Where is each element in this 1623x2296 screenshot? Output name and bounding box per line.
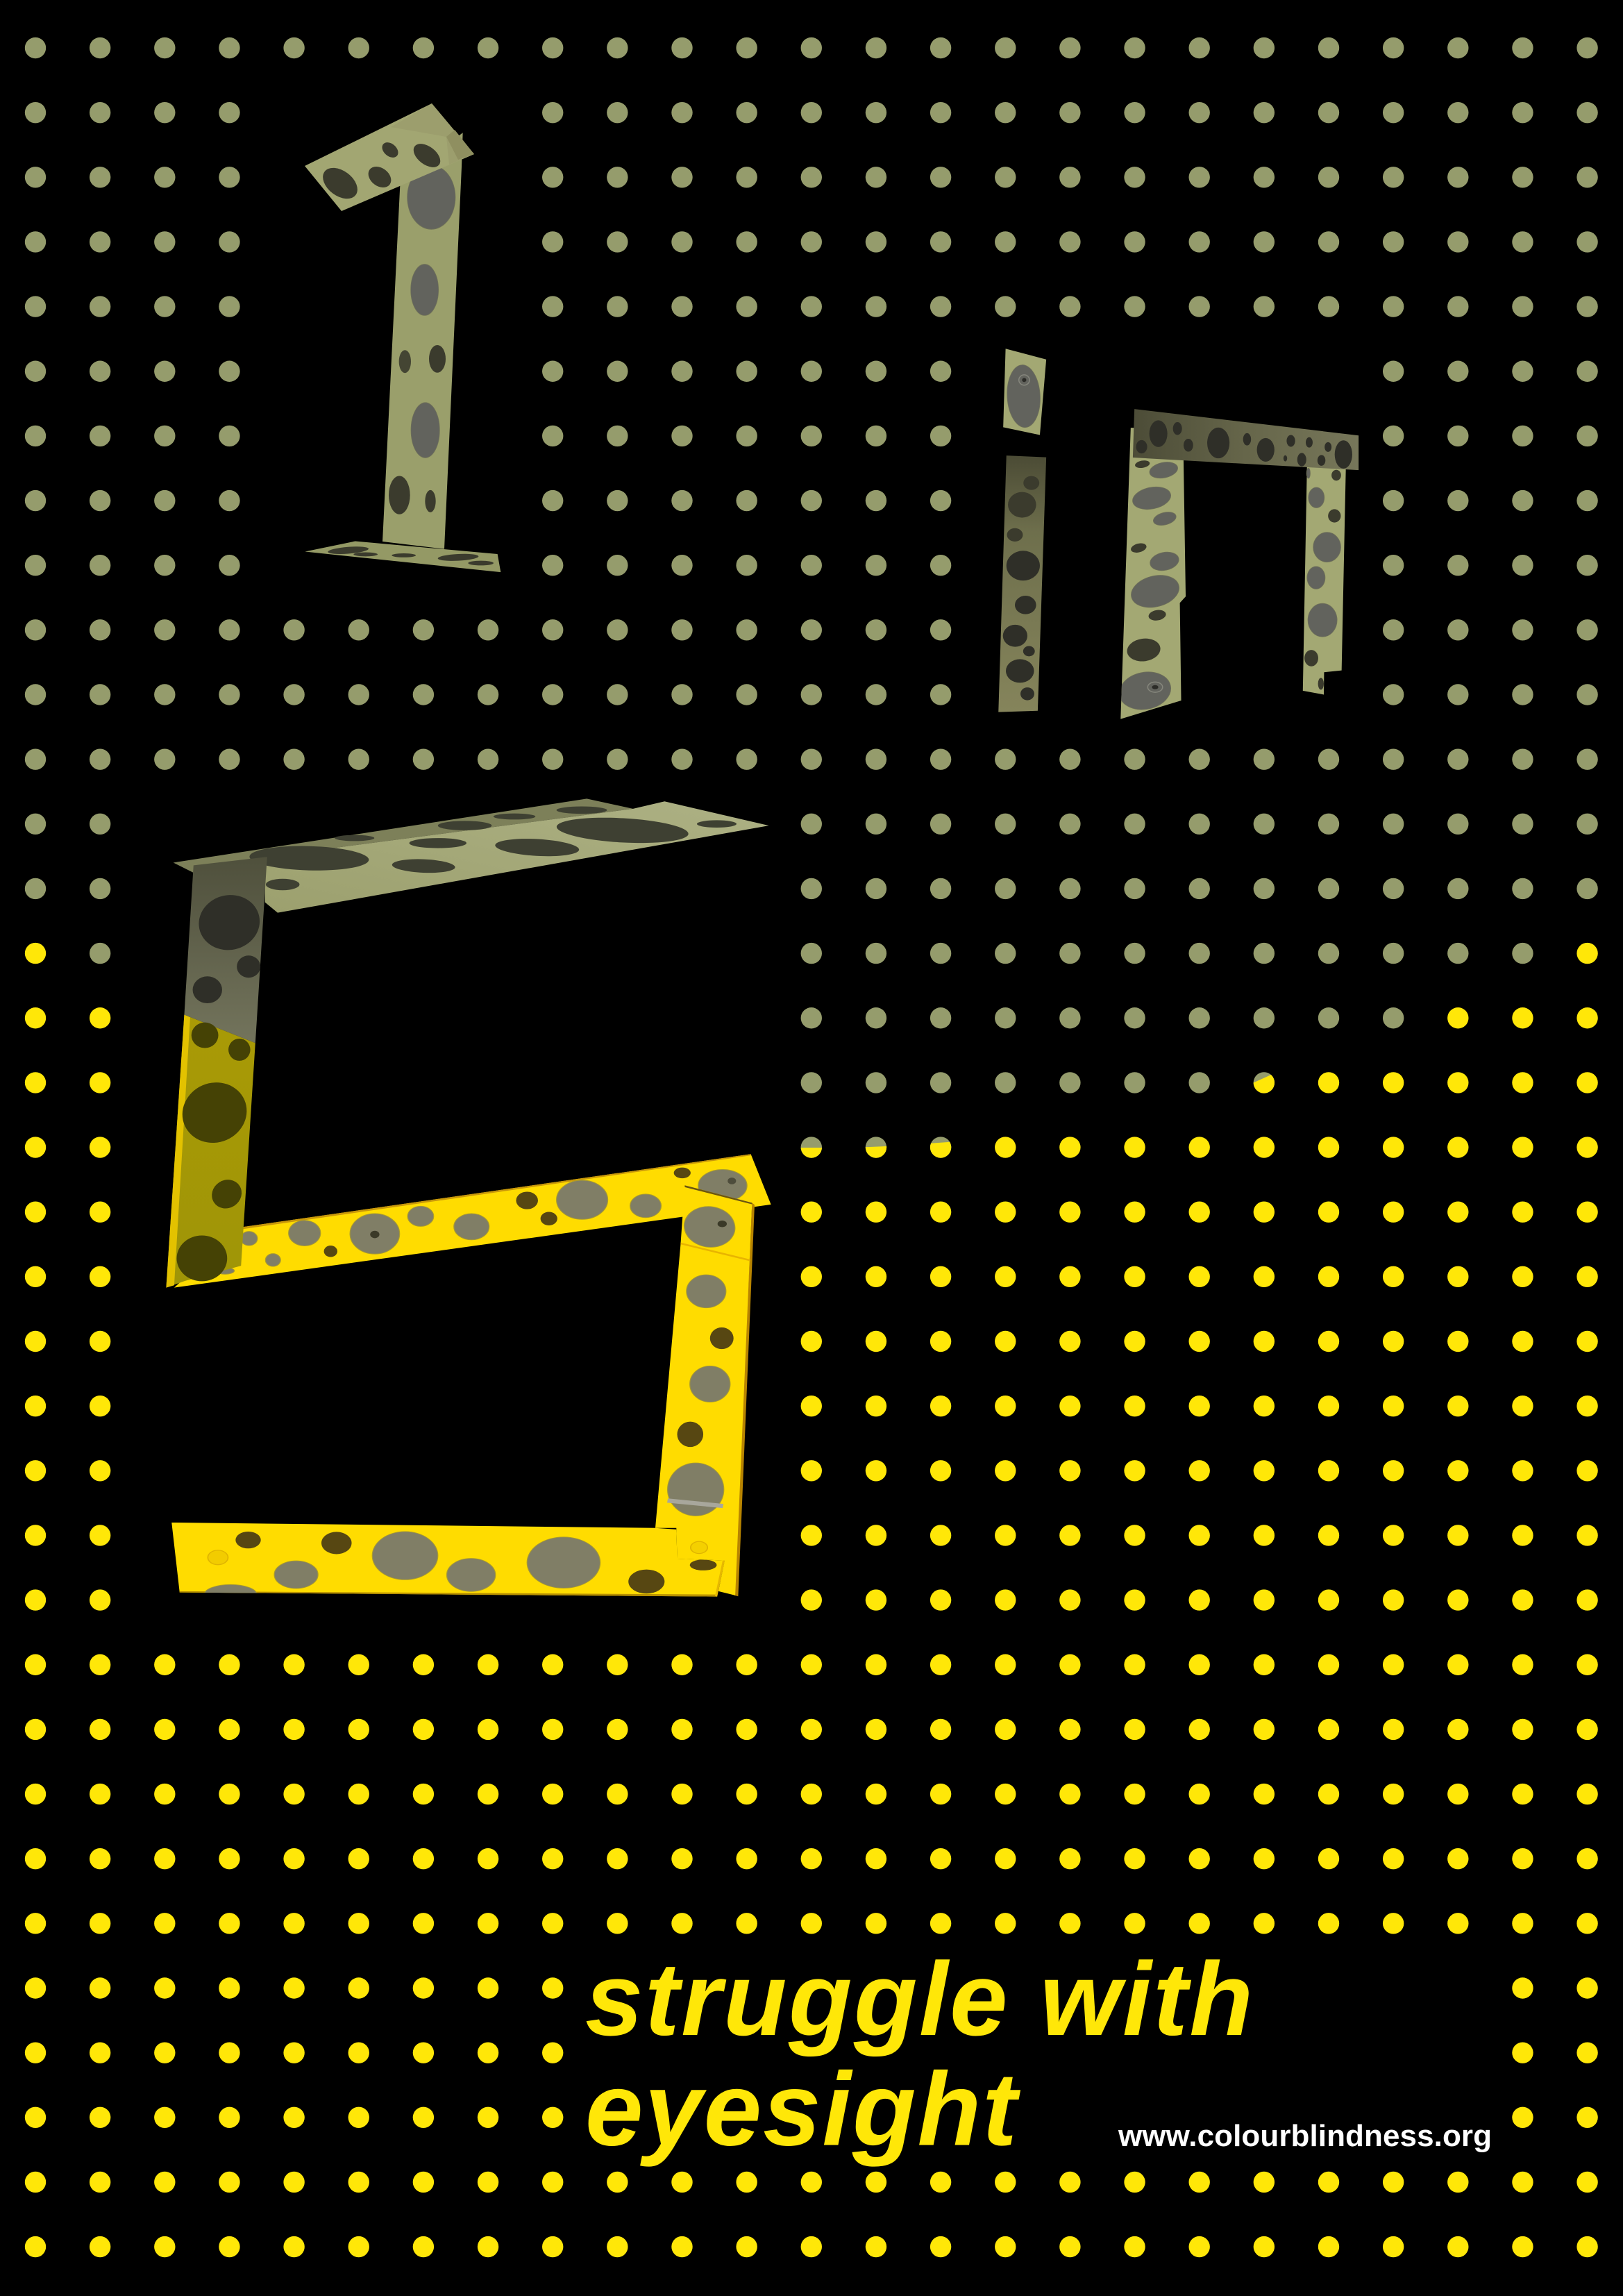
- website url: www.colourblindness.org: [1118, 2119, 1492, 2153]
- numeral 1: stem: [382, 133, 463, 549]
- numeral 1: [305, 103, 501, 572]
- numeral 1: foot: [305, 542, 501, 572]
- letter n: top bar: [1133, 409, 1359, 470]
- letter n: right leg: [1303, 462, 1346, 694]
- numeral 5: left upright: [166, 857, 267, 1288]
- letter i: dot: [1003, 349, 1046, 435]
- word in: [998, 349, 1359, 719]
- transition dots: part grey, part yellow: [801, 1072, 1275, 1158]
- numeral 5: top sheet: [174, 798, 769, 913]
- headline: struggle with eyesight: [585, 1941, 1253, 2168]
- letter n: left leg: [1116, 428, 1186, 719]
- numeral 5: right upright: [655, 1185, 755, 1596]
- letter i: stem: [998, 455, 1046, 712]
- numeral 5: [166, 798, 771, 1604]
- numeral 5: bottom bar: [171, 1523, 725, 1604]
- headline: struggle with eyesight: eyesight: [585, 2051, 1021, 2168]
- headline: struggle with eyesight: struggle with: [585, 1941, 1253, 2057]
- dot grid: yellow dots (lower area): [35, 953, 1588, 2247]
- numeral 5: middle bar: [174, 1154, 771, 1288]
- dot grid: grey-green dots (upper area): [35, 48, 1588, 1148]
- numeral 1: top flag: [305, 103, 474, 211]
